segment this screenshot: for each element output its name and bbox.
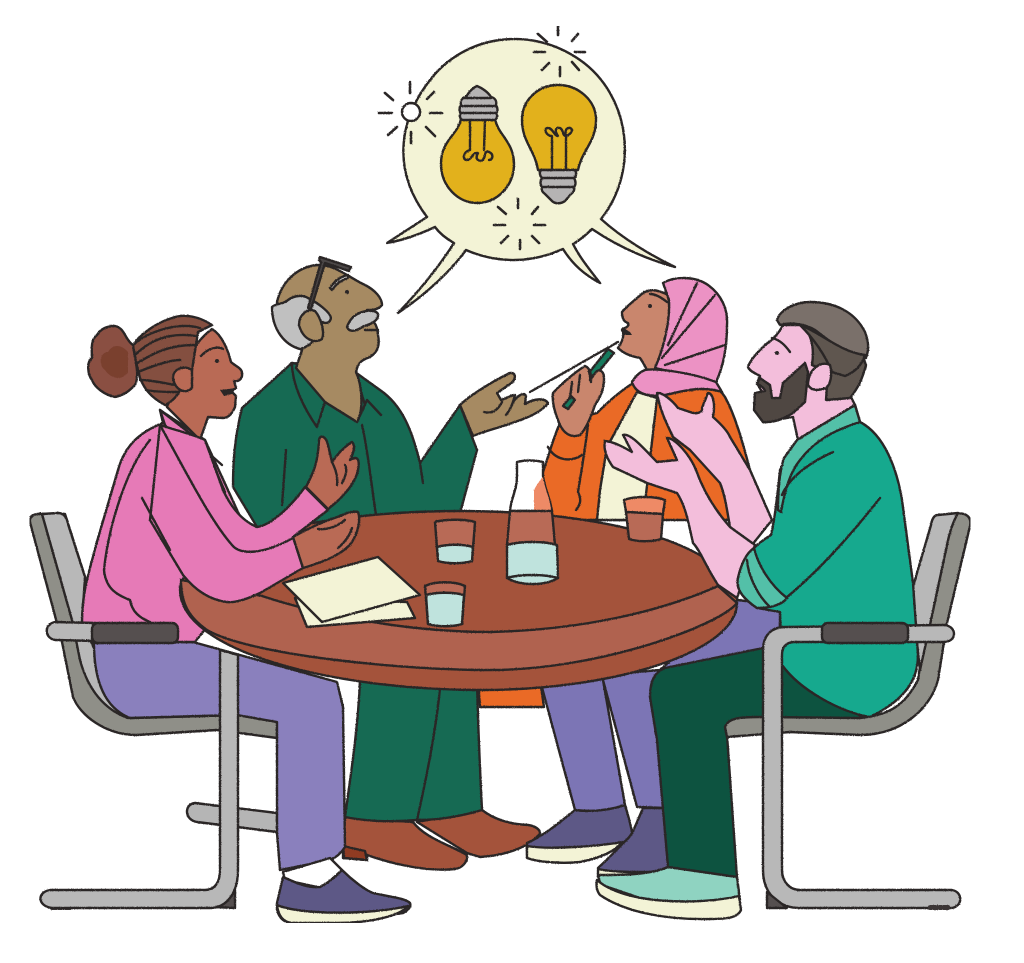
speech bubble with light bulbs (379, 26, 675, 313)
eye (215, 359, 219, 363)
pink scarf drape (632, 370, 722, 396)
eye (648, 304, 652, 308)
bubble outline with four tails (387, 39, 675, 313)
moustache (347, 311, 378, 331)
cream top (597, 392, 657, 520)
left woman's trousers (94, 642, 345, 870)
small rear foot (50, 905, 72, 910)
dark chair shell (30, 514, 277, 738)
left chair back and seat (30, 513, 277, 738)
right chair back and seat (725, 513, 970, 737)
eye (345, 290, 349, 294)
neck and head (167, 329, 242, 440)
sparkle node circle (402, 103, 420, 121)
left woman's sock (283, 858, 342, 888)
pink collar (160, 410, 225, 492)
sparkle lines left (379, 82, 442, 143)
chair cross tube behind left woman (187, 803, 277, 832)
foot shadow (215, 890, 235, 908)
water glass front (425, 582, 465, 626)
bow tie lines (198, 448, 222, 495)
older man upper body (233, 257, 548, 532)
pen tip line (530, 342, 618, 392)
neck and face (748, 325, 855, 440)
ear (808, 364, 831, 390)
raised hand (306, 437, 359, 509)
orange skirt under table (478, 680, 544, 707)
teal shoe sole (596, 880, 741, 919)
shoe heel (343, 846, 367, 860)
ear (173, 368, 192, 391)
left woman's torso (82, 316, 260, 642)
pen end below fingers (563, 396, 575, 409)
green trousers (345, 680, 482, 821)
hijab woman's trousers and shoes (527, 600, 780, 881)
hair bun outer (88, 326, 137, 397)
green shirt (233, 363, 477, 532)
side seam with scallop (104, 440, 150, 622)
collar and placket lines (282, 363, 423, 515)
lighter shirt collar (778, 405, 860, 512)
lighter table edge band (181, 580, 737, 670)
pink torso (82, 410, 260, 642)
front brown shoe (343, 817, 467, 870)
water glass right (624, 497, 665, 541)
ear (299, 310, 323, 341)
navy shoe left (527, 805, 632, 856)
stack of papers (283, 557, 420, 627)
braided hair (133, 316, 212, 405)
armrest pad (92, 623, 178, 643)
carafe (507, 460, 558, 584)
table top (180, 511, 737, 690)
man's trousers and shoes (343, 680, 540, 870)
beard (754, 363, 808, 422)
right man's teal shoe (599, 867, 740, 905)
right man's head (748, 302, 868, 440)
lighter rolled cuff (737, 548, 787, 608)
round table (180, 511, 737, 690)
armrest pad (822, 623, 908, 643)
armrest tube (47, 622, 96, 641)
dark chair shell (725, 514, 970, 737)
upper raised arm and hand (657, 393, 772, 545)
braid lines (133, 326, 200, 392)
mouth (365, 329, 378, 331)
teal shirt (737, 405, 918, 717)
pink hijab head wrap (655, 278, 727, 382)
face (618, 290, 675, 378)
water glass back (435, 520, 475, 563)
hair bun inner (101, 346, 128, 378)
left chair front frame (40, 622, 238, 910)
left woman's shoe (277, 870, 410, 922)
shoe sole (277, 905, 408, 923)
right man's trousers (650, 648, 863, 878)
eyebrow (201, 348, 223, 356)
purple trousers (540, 600, 780, 811)
small rear foot (928, 905, 950, 910)
left light bulb, base up (441, 86, 514, 203)
sleeve fold lines (142, 425, 293, 552)
gray hair (272, 296, 331, 349)
sparkle lines top (534, 26, 585, 76)
orange cardigan (533, 383, 750, 520)
lips (220, 388, 236, 396)
navy shoe right (598, 808, 668, 878)
hair cap (777, 302, 868, 358)
right chair front frame (763, 623, 960, 910)
right man's shirt and arms (605, 393, 918, 717)
hijab woman upper body (530, 278, 750, 520)
light chair back (912, 513, 958, 670)
eye and brow (772, 338, 790, 352)
light chair back (42, 513, 128, 718)
sparkle lines bottom (494, 199, 545, 249)
lower hair (800, 325, 866, 400)
hand holding pen (553, 366, 604, 436)
glasses on head (308, 257, 351, 309)
lower hand (293, 512, 359, 568)
brow line (650, 294, 667, 302)
back brown shoe (417, 810, 540, 857)
raised hand finger lines (332, 462, 346, 485)
mouth (622, 327, 632, 335)
hand lines (484, 402, 513, 415)
green pen (563, 349, 614, 409)
right light bulb, base down (522, 85, 596, 203)
shirt fold lines (747, 452, 880, 607)
foot shadow (767, 892, 787, 908)
head (277, 265, 382, 422)
open hand (460, 373, 548, 436)
lower forearm and hand (605, 435, 755, 598)
left woman's arms and hands (142, 425, 359, 602)
vertical frame and base (40, 650, 238, 908)
eyebrow (330, 275, 348, 290)
lower hand finger lines (318, 520, 352, 548)
cardigan fold lines (548, 425, 588, 510)
far sleeve and near sleeve (150, 425, 328, 602)
finger lines (570, 371, 591, 398)
armrest tube and frame (763, 625, 960, 908)
